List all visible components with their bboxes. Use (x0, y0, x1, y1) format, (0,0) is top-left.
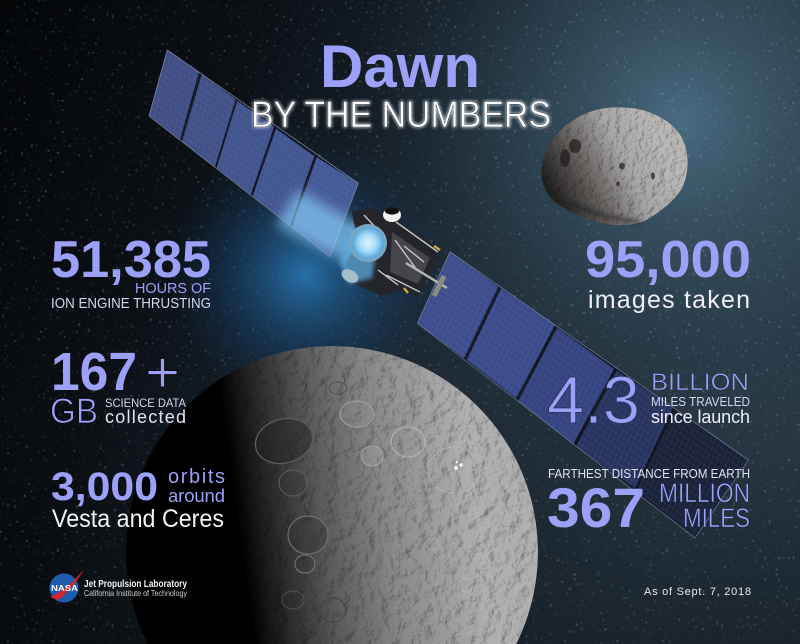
stat: science data (50, 340, 186, 431)
stat: farthest distance: MILLION (659, 478, 750, 508)
stat: orbits: 3,000 (51, 465, 158, 509)
bluish engine halo (340, 225, 378, 284)
stat: science data: collected (105, 407, 186, 427)
stat: images taken (585, 231, 751, 314)
asteroid Vesta (541, 107, 688, 225)
stat: science data: SCIENCE DATA (105, 396, 186, 410)
stat: orbits (51, 465, 225, 533)
title (251, 33, 551, 135)
bright spots in Occator crater (454, 461, 463, 470)
dish antenna (339, 266, 361, 286)
high gain antenna cap (383, 208, 401, 222)
stat: miles traveled: BILLION (651, 369, 749, 396)
stat: farthest distance (547, 466, 750, 539)
date note: As of Sept. 7, 2018 (644, 586, 751, 598)
subtitle: BY THE NUMBERS (251, 94, 551, 135)
stat: orbits: Vesta and Ceres (52, 505, 224, 533)
Vesta craters (560, 139, 655, 186)
ion engine plume (276, 190, 366, 268)
stat: orbits: orbits (168, 466, 225, 488)
stat: ion engine hours: ION ENGINE THRUSTING (51, 296, 211, 312)
craters on Ceres (250, 382, 480, 627)
stat: miles traveled (547, 363, 750, 438)
engine glow (349, 224, 387, 262)
stat: miles traveled: MILES TRAVELED (651, 394, 750, 409)
stat: science data: 167 (51, 342, 137, 402)
stat: farthest distance: 367 (547, 476, 645, 539)
stat: miles traveled: since launch (651, 407, 750, 427)
Vesta dark equatorial troughs (553, 198, 640, 222)
stat: farthest distance: MILES (683, 503, 750, 533)
dwarf planet Ceres (126, 346, 538, 644)
title: Dawn (320, 33, 480, 100)
stat: science data: + (145, 340, 180, 405)
stat: ion engine hours: HOURS OF (135, 280, 211, 297)
stat: ion engine hours: 51,385 (51, 231, 211, 289)
spacecraft bus (339, 207, 447, 296)
logo: NASA JPL (50, 569, 188, 602)
stat: images taken: images taken (588, 286, 750, 314)
right solar array (417, 252, 748, 538)
stat: science data: GB (50, 392, 98, 431)
stat: orbits: around (168, 485, 225, 506)
logo: NASA JPL: Jet Propulsion Laboratory (84, 579, 187, 590)
left solar array (149, 50, 358, 257)
logo: NASA JPL: California Institute of Technology (84, 588, 188, 598)
stat: images taken: 95,000 (585, 231, 751, 289)
icon: NASA meatball: NASA (51, 584, 78, 593)
stat: miles traveled: 4.3 (547, 363, 640, 438)
stat: farthest distance: FARTHEST DISTANCE FROM EARTH (548, 466, 750, 481)
